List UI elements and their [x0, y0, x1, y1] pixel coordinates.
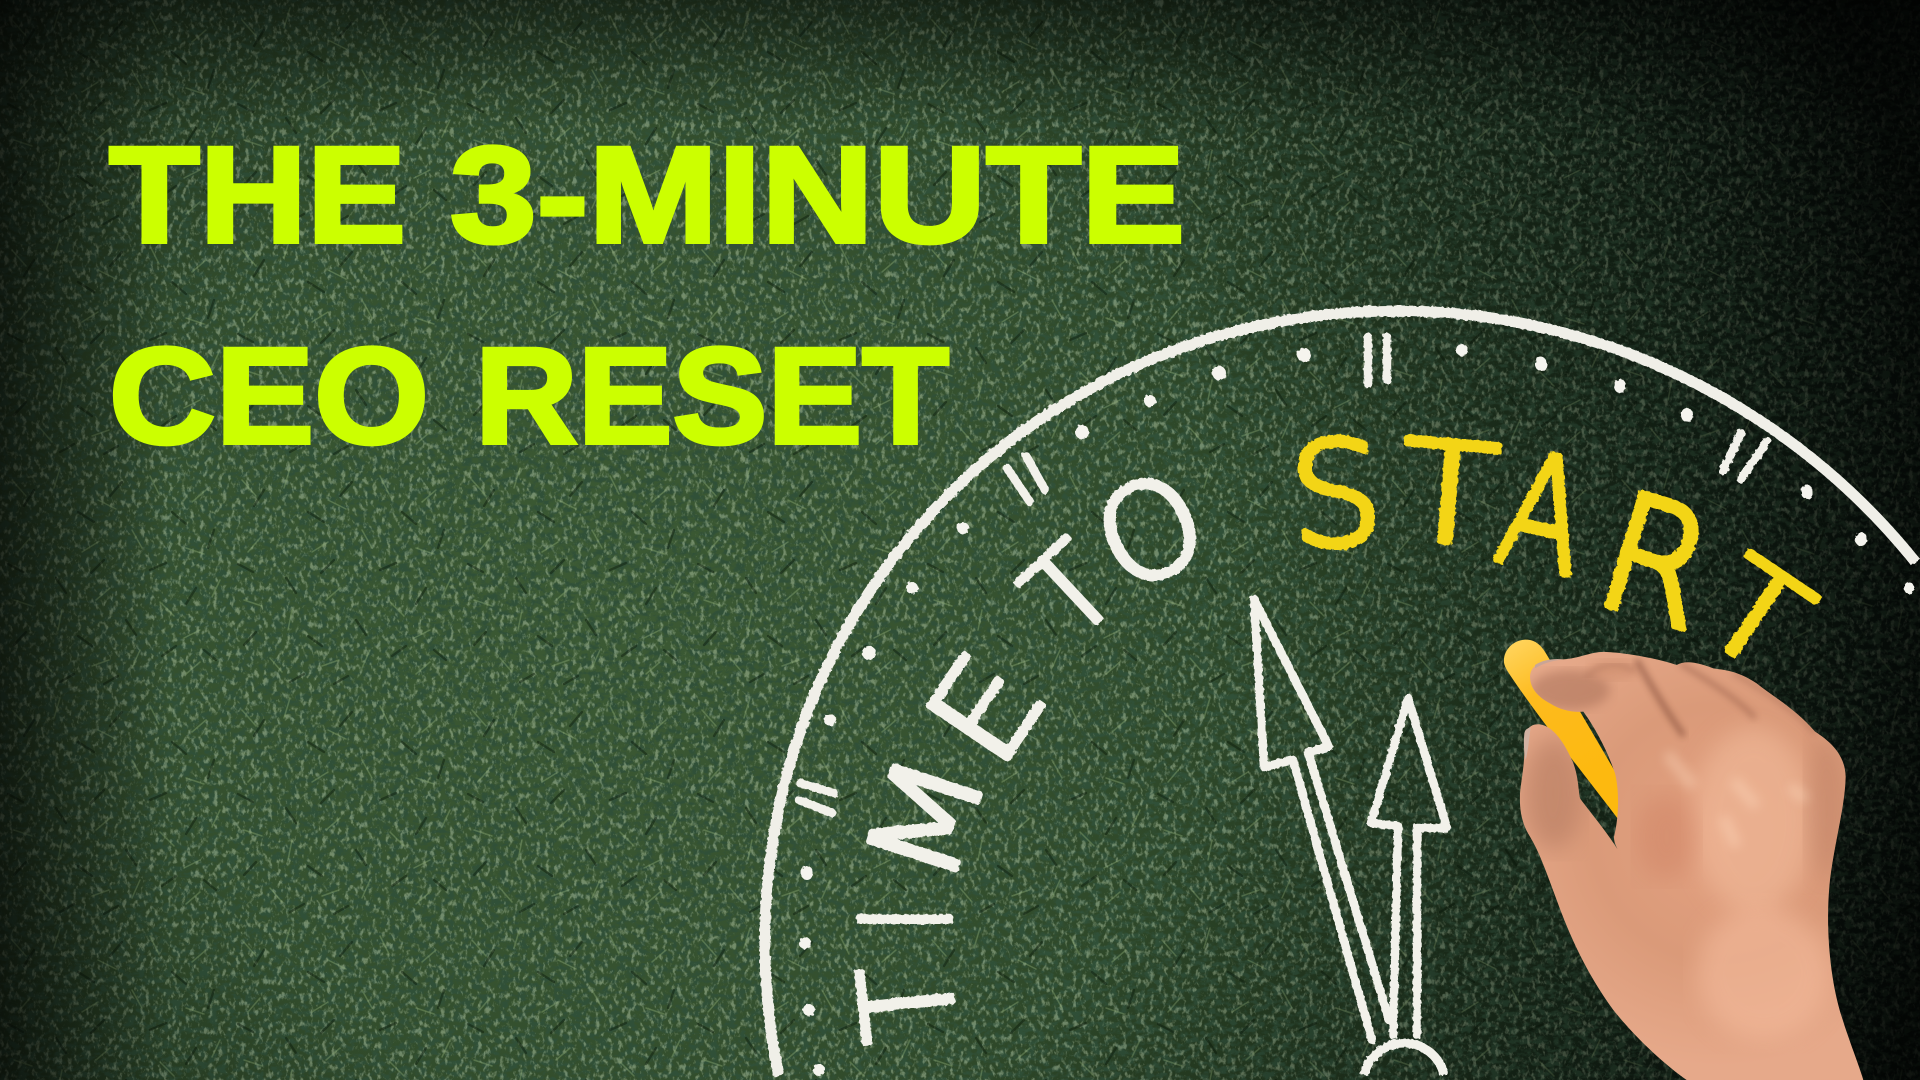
fingernails	[1535, 659, 1563, 668]
chalk word: TIME TO: E	[898, 628, 1076, 791]
title line 2, word 2: RESET	[475, 320, 949, 473]
clock minute hand	[1254, 599, 1389, 1040]
knuckle highlights	[1667, 753, 1807, 847]
clock outer ring	[765, 311, 1916, 1075]
chalk clock drawing	[765, 311, 1916, 1076]
chalk word: TIME TO: T	[832, 957, 986, 1048]
chalk word: TIME TO: T	[999, 517, 1144, 665]
title line 2, word 1: CEO	[109, 320, 429, 473]
clock hour ticks	[799, 337, 1767, 813]
yellow chalk stick	[1504, 640, 1620, 822]
hand silhouette	[1513, 650, 1867, 1080]
title line 1, word 2: 3-MINUTE	[450, 119, 1185, 272]
chalk word: TIME TO: I	[834, 904, 980, 934]
clock minute dots	[799, 344, 1914, 1076]
clock hub	[1364, 1043, 1444, 1075]
hand holding yellow chalk	[1504, 640, 1867, 1080]
chalk word: TIME TO: O	[1072, 441, 1229, 622]
chalk word: TIME TO: M	[838, 736, 1015, 901]
chalk word: START: T	[1393, 411, 1504, 578]
chalk word: START: A	[1485, 417, 1603, 611]
hand shading	[1693, 727, 1813, 913]
clock hour hand	[1371, 698, 1447, 1035]
chalk word: START	[1286, 409, 1835, 703]
chalk word: START: R	[1579, 458, 1733, 667]
chalk word: START: T	[1677, 529, 1835, 703]
chalk word: TIME TO	[832, 441, 1229, 1048]
chalk word: START: S	[1286, 409, 1386, 581]
title line 1, word 1: THE	[109, 119, 406, 272]
finger creases	[1637, 660, 1684, 736]
title	[109, 119, 1185, 473]
